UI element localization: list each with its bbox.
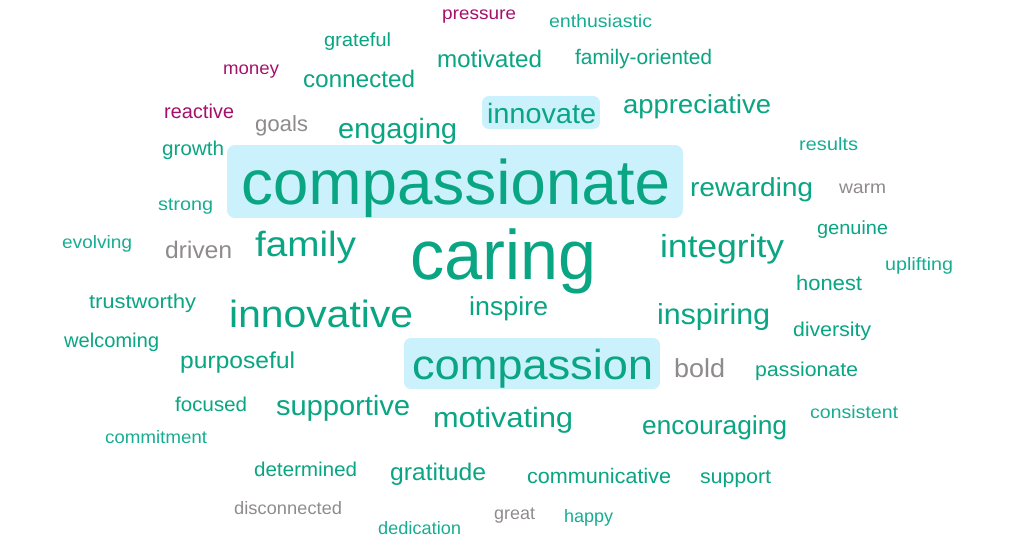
word: integrity: integrity [660,228,784,264]
word: dedication: dedication [378,518,461,538]
word: reactive: reactive [164,101,234,123]
word: motivating: motivating [433,402,573,433]
word: focused: focused [175,394,247,416]
word: purposeful: purposeful [180,347,295,373]
word: encouraging: encouraging [642,410,787,440]
word: communicative: communicative [527,465,671,488]
highlight: compassion [404,338,660,389]
word: compassionate: compassionate [241,148,670,218]
word: disconnected: disconnected [234,498,342,518]
word: bold: bold [674,353,725,383]
word: determined: determined [254,459,357,481]
word: innovative: innovative [229,294,413,336]
word: strong: strong [158,194,213,214]
word: caring: caring [410,216,596,294]
word: money: money [223,58,279,78]
word: warm: warm [838,177,886,197]
word: motivated: motivated [437,46,542,73]
word: trustworthy: trustworthy [89,291,196,313]
word: appreciative: appreciative [623,89,771,119]
word: evolving: evolving [62,232,132,252]
word: support: support [700,466,771,488]
word: rewarding: rewarding [690,172,813,202]
word: genuine: genuine [817,218,888,239]
word: engaging: engaging [338,113,457,144]
word: commitment: commitment [105,427,207,447]
word: family-oriented: family-oriented [575,46,712,69]
word: gratitude: gratitude [390,459,486,486]
word: welcoming: welcoming [63,330,159,352]
word: enthusiastic: enthusiastic [549,11,652,31]
highlight: innovate [482,96,600,129]
word: inspire: inspire [469,291,548,321]
word: happy: happy [564,506,613,526]
word: consistent: consistent [810,402,898,422]
word: pressure: pressure [442,3,516,23]
word: innovate: innovate [487,98,596,129]
highlight: compassionate [227,145,683,218]
word: connected: connected [303,66,415,93]
word: driven: driven [165,237,232,264]
word: uplifting: uplifting [885,254,953,274]
word: family: family [255,225,357,264]
word: goals: goals [255,111,308,136]
word: growth: growth [162,138,224,160]
word: inspiring: inspiring [657,299,770,331]
word: grateful: grateful [324,30,391,51]
word: supportive: supportive [276,390,410,421]
word: passionate: passionate [755,359,858,381]
word: diversity: diversity [793,319,871,341]
word: honest: honest [796,272,862,295]
word: compassion: compassion [412,341,653,388]
word: great: great [494,503,535,523]
word: results: results [799,134,858,154]
